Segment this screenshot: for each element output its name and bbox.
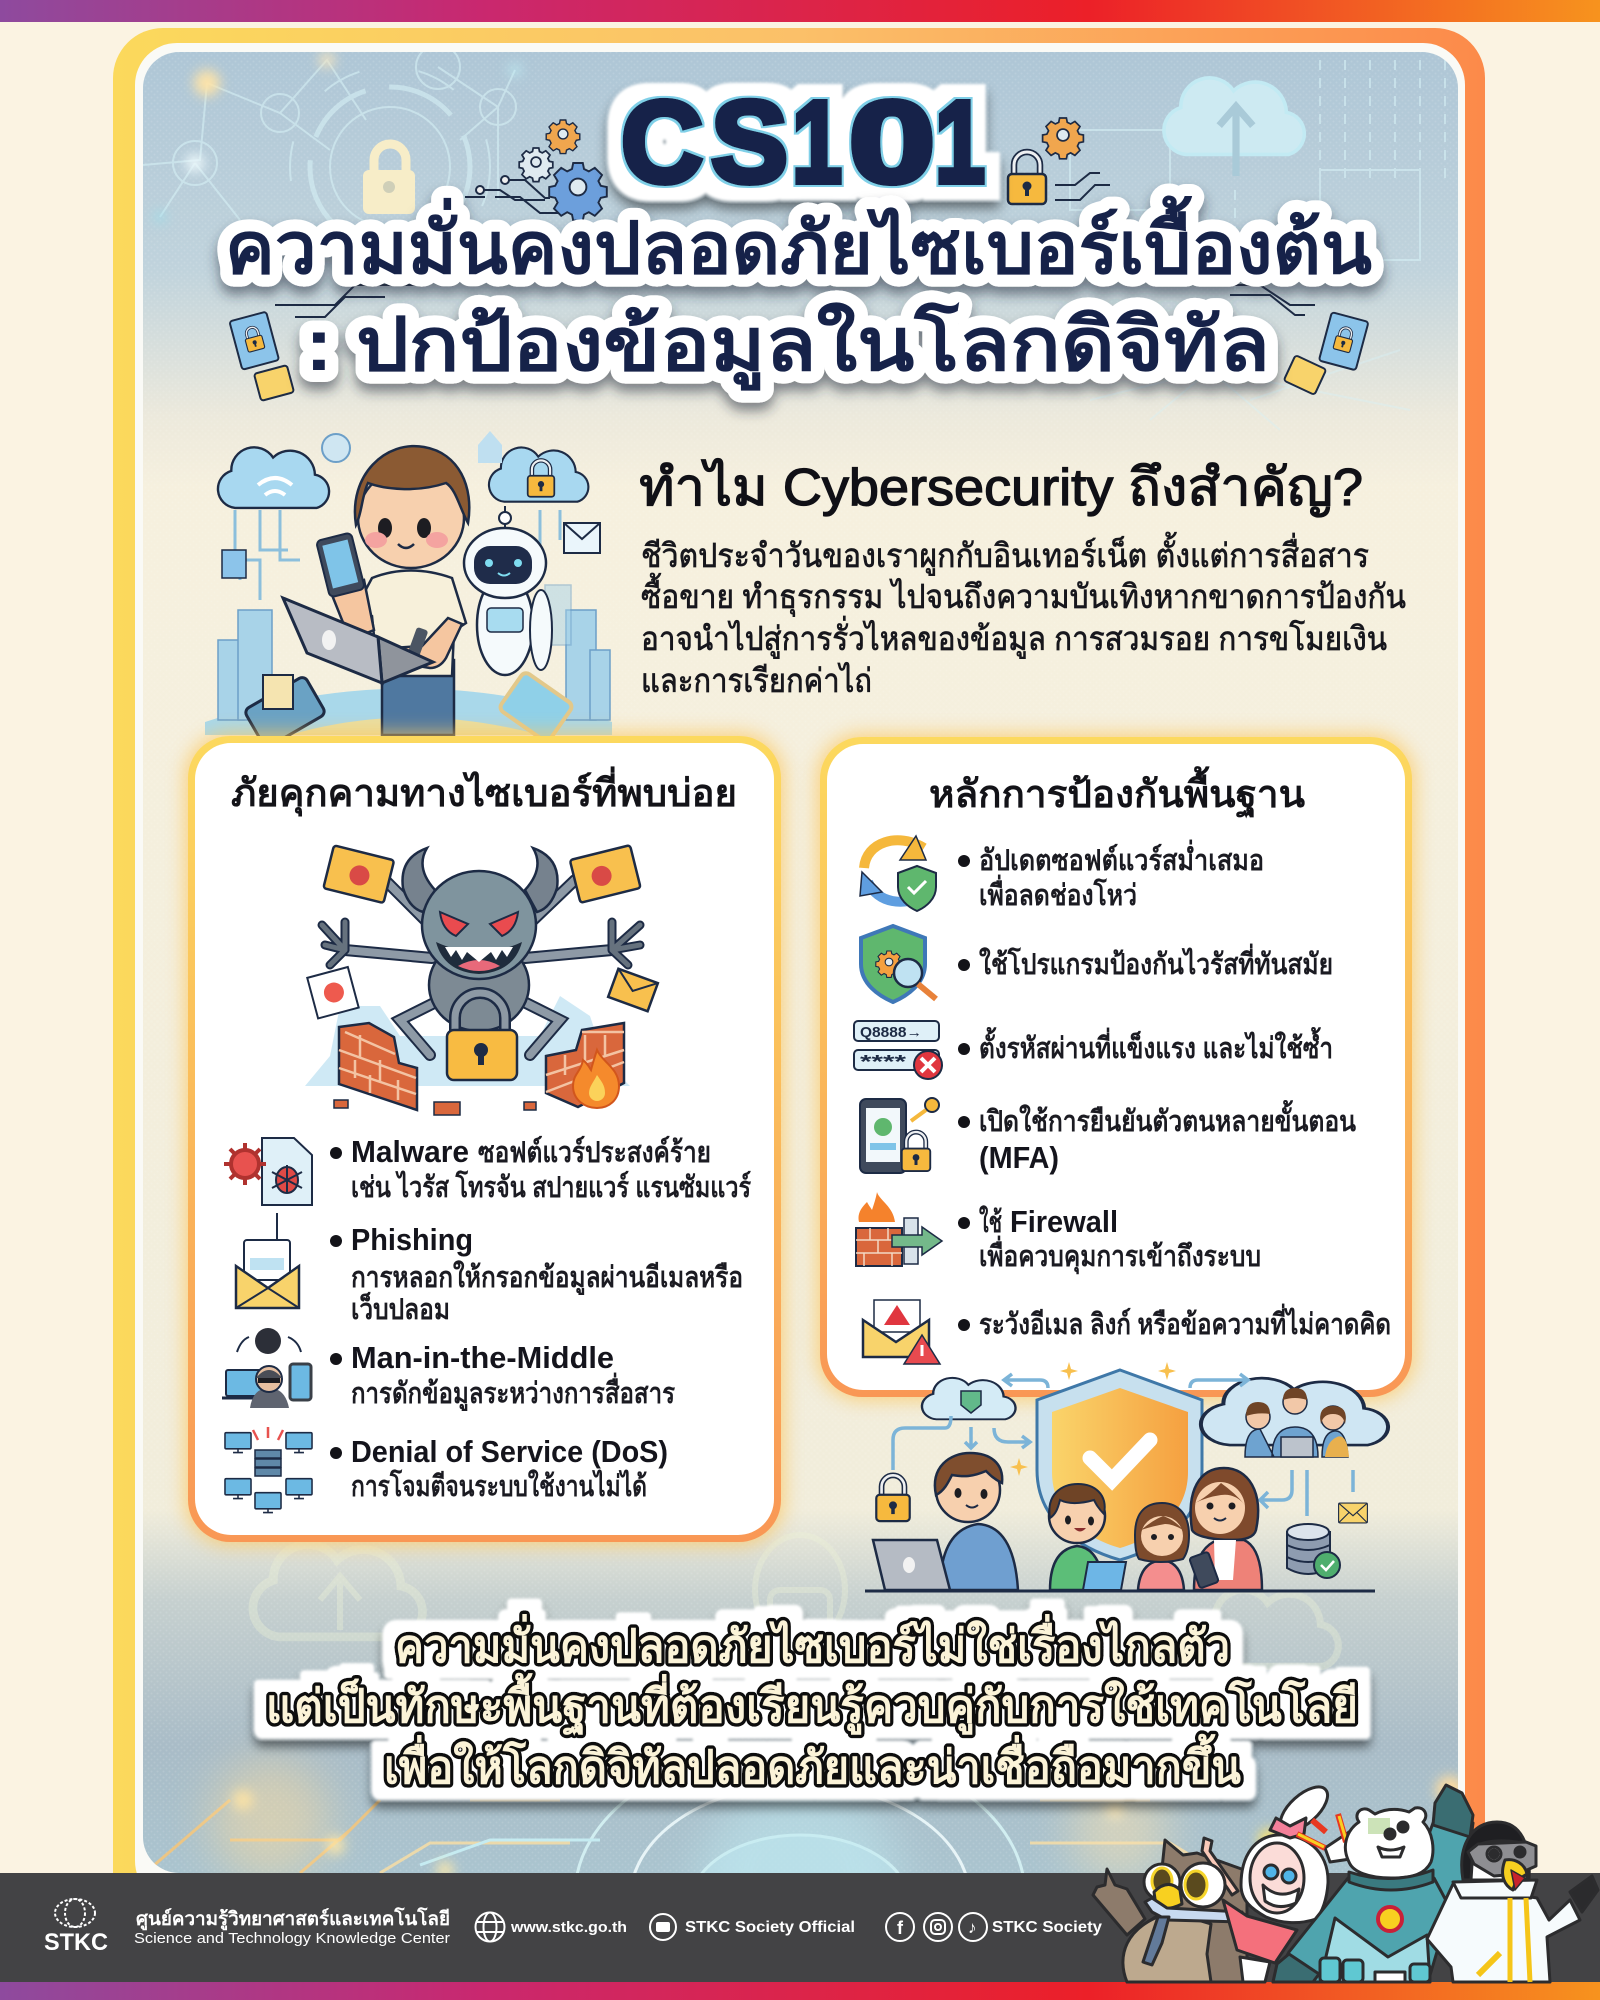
closing message: แต่เป็นทักษะพื้นฐานที่ต้องเรียนรู้ควบคู่กับการใช้เทคโนโลยี	[266, 1672, 1358, 1736]
title: CS101: 1	[792, 77, 842, 207]
title: CS101: S	[711, 77, 788, 207]
robot	[464, 506, 552, 675]
text: denial of service: การโจมตีจนระบบใช้งานไม่ได้	[351, 1468, 647, 1503]
head	[422, 871, 536, 979]
text: denial of service	[330, 1434, 668, 1503]
icon: suspicious email	[863, 1300, 940, 1364]
top gradient bar	[0, 0, 1600, 22]
ground line	[865, 1590, 1375, 1592]
intro paragraph: ซื้อขาย ทำธุรกรรม ไปจนถึงความบันเทิงหากขาดการป้องกัน	[641, 573, 1406, 617]
section heading: ทำไม Cybersecurity ถึงสำคัญ?	[639, 458, 1363, 517]
title: thai lines: : ปกป้องข้อมูลในโลกดิจิทัล	[305, 301, 1270, 391]
footer: organisation name: Science and Technology Knowledge Center	[134, 1931, 450, 1947]
title: CS101: 1	[935, 77, 985, 207]
mascot: owl	[1093, 1838, 1247, 1982]
text: man in the middle	[330, 1340, 675, 1411]
big shield	[1037, 1370, 1202, 1560]
icon: firewall	[856, 1192, 942, 1266]
icon: mfa	[860, 1098, 939, 1173]
background: faint cloud and lock	[248, 1566, 1342, 1670]
boy head	[358, 468, 464, 568]
text: suspicious email: ระวังอีเมล ลิงก์ หรือข้อความที่ไม่คาดคิด	[979, 1303, 1391, 1341]
illustration: robot monster breaking firewall	[305, 845, 658, 1115]
heading: protection: หลักการป้องกันพื้นฐาน	[929, 766, 1305, 819]
text: firewall	[958, 1204, 1261, 1274]
mascot: polar bear	[1273, 1785, 1473, 1982]
girl	[1135, 1503, 1189, 1590]
claws	[322, 922, 640, 965]
text: phishing	[330, 1222, 743, 1326]
footer: youtube	[650, 1914, 855, 1940]
footer: organisation name: ศูนย์ความรู้วิทยาศาสตร์และเทคโนโลยี	[136, 1907, 450, 1931]
text: update: อัปเดตซอฟต์แวร์สม่ำเสมอ	[979, 839, 1264, 877]
text: update: เพื่อลดช่องโหว่	[979, 874, 1137, 912]
tablet and phone on ground	[498, 671, 574, 743]
text: mfa: (MFA)	[979, 1140, 1059, 1175]
icon: phishing	[236, 1213, 299, 1308]
footer: website	[476, 1912, 627, 1942]
text: malware: Malware	[351, 1134, 469, 1169]
woman	[1189, 1468, 1262, 1590]
text: man in the middle: Man-in-the-Middle	[351, 1340, 614, 1375]
closing message: เพื่อให้โลกดิจิทัลปลอดภัยและน่าเชื่อถือมากขึ้น	[384, 1733, 1242, 1793]
footer: social media	[886, 1913, 1102, 1941]
text: man in the middle: การดักข้อมูลระหว่างการสื่อสาร	[351, 1372, 675, 1411]
heading: threats: ภัยคุกคามทางไซเบอร์ที่พบบ่อย	[231, 766, 737, 817]
footer: youtube: STKC Society Official	[685, 1919, 855, 1936]
icon: update	[860, 836, 936, 911]
text: malware: ซอฟต์แวร์ประสงค์ร้าย	[478, 1135, 711, 1169]
cloud with people	[1201, 1378, 1388, 1457]
mascot: penguin	[1427, 1822, 1598, 1982]
arms	[345, 880, 612, 1055]
panel: basic protection	[820, 737, 1412, 1397]
cloud with shield	[922, 1378, 1016, 1419]
icon: strong password	[854, 1021, 942, 1079]
footer: social media: ♪	[968, 1918, 976, 1937]
text: firewall: ใช้	[979, 1205, 1002, 1239]
footer bar	[0, 1873, 1600, 1982]
text: mfa	[958, 1099, 1356, 1175]
boy body	[382, 660, 454, 735]
man and laptop	[873, 1453, 1018, 1590]
footer: STKC logo	[44, 1899, 108, 1956]
white inner frame	[135, 43, 1465, 1903]
debris	[334, 1100, 536, 1115]
text: phishing: Phishing	[351, 1222, 473, 1257]
intro paragraph: และการเรียกค่าไถ่	[641, 662, 872, 699]
illustration: boy with laptop and robot	[205, 431, 612, 749]
background: lower tech rings	[154, 1799, 1189, 1873]
text: strong password	[958, 1026, 1333, 1065]
title: thai lines: ความมั่นคงปลอดภัยไซเบอร์เบื้องต้น	[225, 195, 1372, 289]
background: upload cloud	[1164, 78, 1304, 176]
text: update	[958, 839, 1264, 912]
body	[429, 939, 529, 1031]
footer: social media: STKC Society	[992, 1919, 1102, 1936]
text: denial of service: Denial of Service (DoS)	[351, 1434, 668, 1469]
icon: man in the middle	[222, 1328, 311, 1408]
icon: malware	[224, 1138, 312, 1205]
icon: envelope	[1339, 1503, 1367, 1523]
panel: common threats	[188, 736, 781, 1542]
flow arrows	[893, 1374, 1353, 1516]
text: mfa: เปิดใช้การยืนยันตัวตนหลายขั้นตอน	[979, 1099, 1356, 1138]
background: large lock	[363, 144, 415, 214]
big lock	[455, 993, 505, 1032]
footer: website: www.stkc.go.th	[510, 1919, 627, 1936]
intro paragraph: อาจนำไปสู่การรั่วไหลของข้อมูล การสวมรอย การขโมยเงิน	[641, 616, 1387, 659]
text: phishing: เว็บปลอม	[351, 1291, 450, 1326]
icon: strong password: ****	[860, 1052, 906, 1072]
closing message	[266, 1614, 1358, 1793]
background: lower glows	[233, 1776, 1464, 1878]
intro paragraph	[641, 532, 1406, 699]
flame	[573, 1050, 619, 1108]
title decorations: gears and circuits	[229, 118, 1369, 401]
background: node dots	[154, 52, 521, 223]
title: CS101	[621, 77, 985, 207]
database	[1287, 1524, 1340, 1578]
icon: padlock	[876, 1475, 910, 1521]
text: antivirus: ใช้โปรแกรมป้องกันไวรัสที่ทันสมัย	[979, 943, 1333, 981]
intro paragraph: ชีวิตประจำวันของเราผูกกับอินเทอร์เน็ต ตั้งแต่การสื่อสาร	[641, 532, 1369, 576]
icon: antivirus	[861, 926, 936, 1002]
footer: organisation name	[134, 1907, 450, 1947]
bottom gradient bar	[0, 1982, 1600, 2000]
text: firewall: Firewall	[1010, 1204, 1118, 1239]
footer: STKC logo: STKC	[44, 1929, 108, 1956]
title: CS101: 0	[849, 77, 935, 207]
sparkles	[1010, 1362, 1176, 1476]
title: CS101: C	[621, 77, 703, 207]
text: malware	[330, 1134, 751, 1204]
card glow	[184, 732, 1416, 1546]
text: suspicious email	[958, 1303, 1391, 1341]
illustration: family behind shield	[865, 1362, 1388, 1591]
text: antivirus	[958, 943, 1333, 981]
text: phishing: การหลอกให้กรอกข้อมูลผ่านอีเมลหรือ	[351, 1260, 743, 1295]
phone	[316, 532, 365, 597]
closing message: ความมั่นคงปลอดภัยไซเบอร์ไม่ใช่เรื่องไกลตัว	[395, 1614, 1230, 1672]
horns	[402, 848, 558, 912]
folders	[323, 845, 394, 903]
icon: strong password: Q8888→	[860, 1024, 922, 1041]
mascot: bunny	[1223, 1779, 1377, 1982]
boy and tablet	[1049, 1484, 1126, 1590]
note and envelope	[307, 967, 359, 1018]
text: strong password: ตั้งรหัสผ่านที่แข็งแรง และไม่ใช้ซ้ำ	[979, 1026, 1333, 1065]
title: thai lines	[225, 195, 1372, 391]
icon: denial of service	[225, 1427, 312, 1513]
laptop	[378, 637, 433, 683]
broken brick walls	[339, 1023, 417, 1110]
text: firewall: เพื่อควบคุมการเข้าถึงระบบ	[979, 1235, 1261, 1274]
text: malware: เช่น ไวรัส โทรจัน สปายแวร์ แรนซัมแวร์	[351, 1169, 751, 1204]
footer: social media: f	[897, 1918, 904, 1938]
